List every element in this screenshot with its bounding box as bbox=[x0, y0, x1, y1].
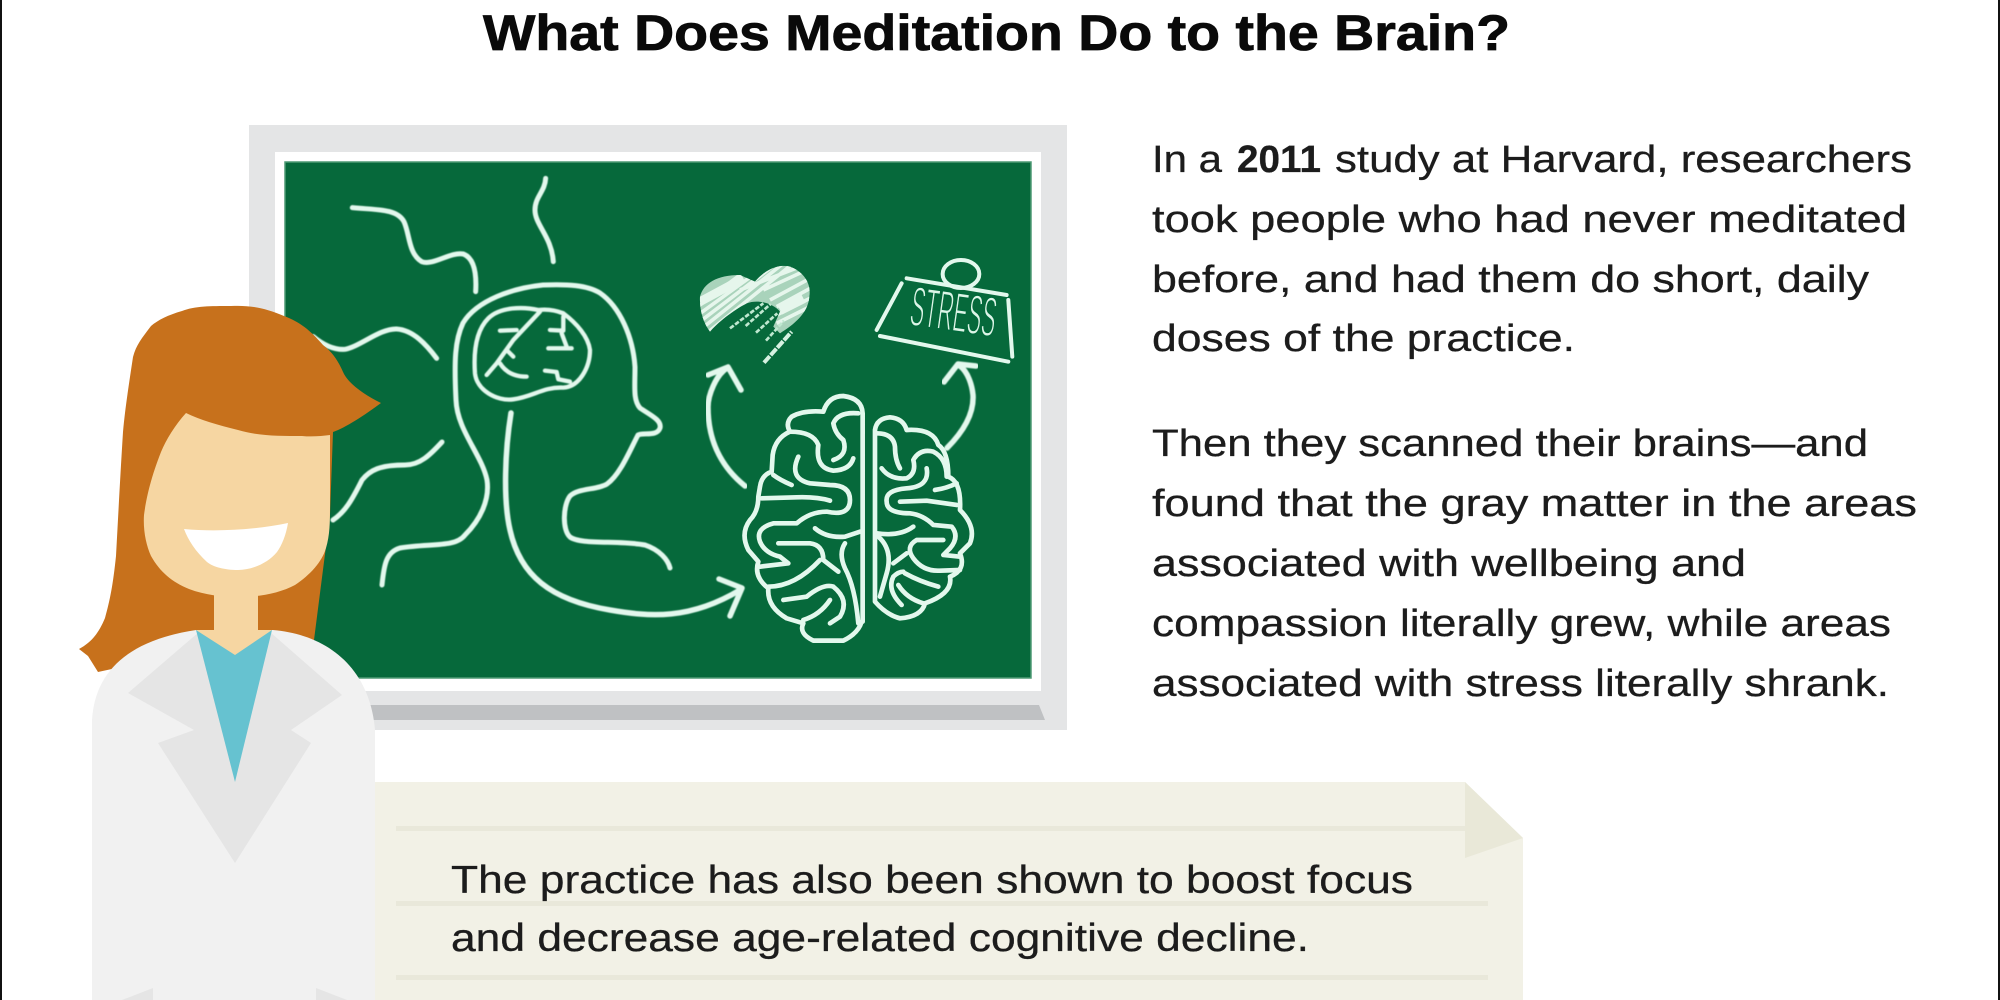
text block: study description: before, and had them do short, daily bbox=[1152, 259, 1869, 301]
wave left bbox=[313, 329, 437, 358]
green board surface bbox=[285, 162, 1031, 678]
title: What Does Meditation Do to the Brain? bbox=[483, 5, 1510, 61]
smile bbox=[184, 523, 288, 570]
chalkboard frame bbox=[249, 125, 1067, 730]
text block: study description: took people who had never meditated bbox=[1152, 199, 1907, 241]
chalk brain bbox=[745, 396, 972, 641]
coat pockets bbox=[122, 988, 347, 1000]
arrow: brain to heart bbox=[708, 367, 745, 486]
note fold bbox=[1465, 782, 1523, 858]
text block: study description: doses of the practice. bbox=[1152, 318, 1575, 360]
teal shirt bbox=[196, 630, 272, 782]
head outline bbox=[382, 285, 670, 585]
chalk heart bbox=[700, 266, 810, 364]
text block: scan findings: associated with wellbeing and bbox=[1152, 543, 1746, 585]
text block: scan findings: compassion literally grew, while areas bbox=[1152, 603, 1891, 645]
text block: study description: 2011 bbox=[1237, 139, 1321, 181]
text block: scan findings: associated with stress literally shrank. bbox=[1152, 663, 1889, 705]
panel: speech note bbox=[375, 782, 1523, 1000]
wave lower left bbox=[333, 442, 442, 520]
chalk drawing: head with brain and radiating waves bbox=[313, 178, 670, 585]
panel: chalkboard bbox=[249, 125, 1067, 730]
note text: and decrease age-related cognitive decline. bbox=[451, 917, 1309, 960]
note text bbox=[451, 859, 1413, 960]
arrow: brain to stress weight bbox=[944, 364, 976, 448]
arrow: head to brain bbox=[506, 413, 742, 616]
text block: scan findings: Then they scanned their brains—and bbox=[1152, 423, 1868, 465]
wave top bbox=[535, 178, 553, 262]
coat lapels bbox=[128, 632, 342, 863]
panel: chalkboard: STRESS bbox=[907, 274, 1001, 349]
text block: study description: study at Harvard, researchers bbox=[1335, 139, 1912, 181]
text block: scan findings bbox=[1152, 423, 1917, 705]
face bbox=[144, 413, 330, 597]
wave top left bbox=[352, 208, 476, 292]
note text: The practice has also been shown to boost focus bbox=[451, 859, 1413, 902]
text block: study description: In a bbox=[1152, 139, 1223, 181]
chalk stress weight bbox=[877, 260, 1012, 362]
left hemisphere bbox=[745, 396, 863, 641]
neck bbox=[196, 590, 272, 655]
hair bbox=[79, 306, 381, 672]
ruled lines bbox=[396, 826, 1488, 980]
brain inside head bbox=[475, 308, 590, 400]
note body bbox=[375, 782, 1523, 1000]
illustration: scientist woman bbox=[79, 306, 381, 1000]
right hemisphere bbox=[875, 417, 972, 618]
lab coat bbox=[92, 630, 375, 1000]
text block: study description bbox=[1152, 139, 1912, 360]
text block: scan findings: found that the gray matter in the areas bbox=[1152, 483, 1917, 525]
